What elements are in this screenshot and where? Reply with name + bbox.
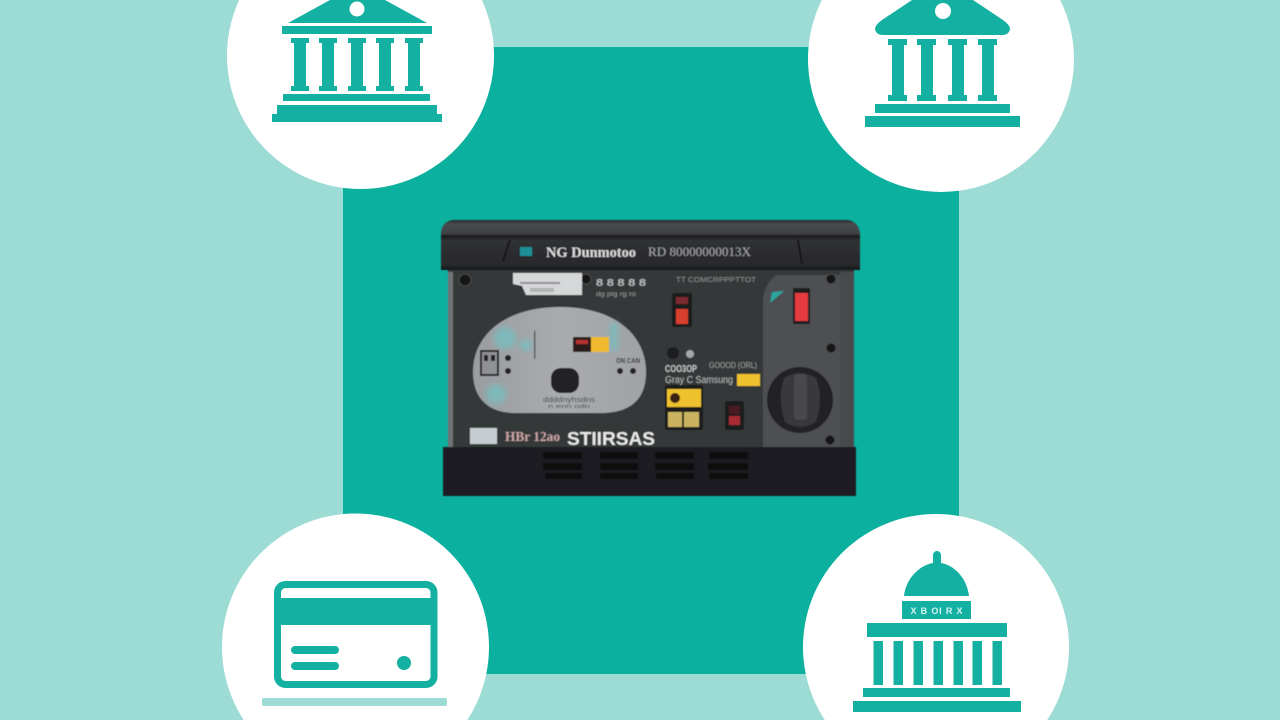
model label: RD 80000000013X (648, 244, 752, 259)
yellow warning stickers (665, 385, 703, 430)
panel caption: ddddnyhsdns (543, 397, 596, 404)
icon: domed government building (853, 551, 1021, 712)
bottom red label: HBr 12ao (505, 430, 560, 445)
vents (543, 452, 748, 479)
brand label: NG Dunmotoo (546, 245, 636, 261)
icon circle: bank top right (808, 0, 1074, 192)
panel small print: TT COMCRPPPTTOT (676, 277, 757, 284)
generator left edge strip (448, 272, 453, 447)
screws (459, 274, 836, 445)
panel caption line: n enn odn (548, 404, 590, 410)
top small print line: dg pig rg ro (596, 292, 637, 298)
icon circle: capitol bottom right (803, 514, 1069, 720)
central teal square (343, 47, 959, 674)
panel right dots (617, 368, 636, 374)
top small print: 8 8 8 8 8 (596, 278, 647, 289)
icon: domed government building: X B OI R X (910, 606, 962, 616)
icon circle: credit card bottom left (222, 514, 489, 720)
small round controls (667, 347, 694, 359)
large round dial outlet (767, 367, 833, 433)
top white sticker (513, 273, 582, 295)
icon circle: bank top left (227, 0, 494, 189)
small yellow sticker (737, 374, 760, 386)
grey oval control panel (473, 307, 646, 413)
teal blotches (486, 323, 618, 404)
generator (441, 220, 860, 496)
icon: classical bank with five columns (272, 0, 442, 122)
cap notch marks (503, 240, 802, 264)
icon: credit card (262, 584, 447, 706)
small print above yellow sticker: COO3OP (665, 364, 697, 375)
teal fleck (770, 291, 784, 303)
generator body (448, 268, 854, 449)
lower small red switch (725, 401, 744, 430)
panel icon left (481, 351, 511, 375)
bottom white label (470, 428, 497, 444)
teal indicator light (520, 247, 532, 256)
base with vents (443, 447, 856, 496)
panel knob (551, 368, 579, 393)
generator right side panel (763, 275, 840, 447)
icon: bank with four columns (865, 0, 1020, 127)
generator right edge strip (840, 272, 854, 447)
panel divider (534, 331, 536, 359)
generator top cap (441, 220, 860, 270)
panel indicator red and yellow (573, 337, 609, 352)
upper small red switch (672, 293, 692, 327)
bottom white text: STIIRSAS (567, 429, 655, 449)
panel label right: ON CAN (616, 358, 640, 365)
small print right: GOOOD (ORL) (709, 361, 757, 370)
large red rocker switch (793, 288, 810, 324)
small print block: Gray C Samsung (665, 375, 733, 386)
